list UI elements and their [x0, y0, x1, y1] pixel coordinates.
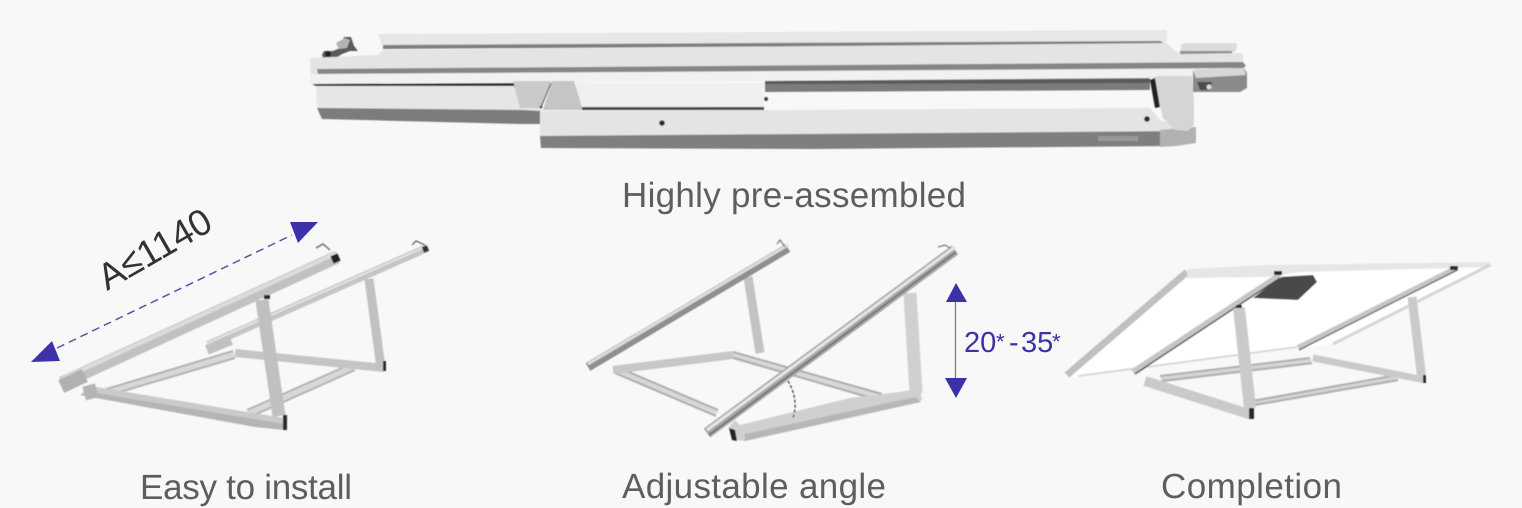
rear base beam	[235, 353, 384, 368]
lower left beam	[316, 86, 542, 124]
arrowhead up	[946, 283, 967, 302]
beam right end block	[1193, 68, 1247, 92]
side tubes	[1160, 358, 1398, 405]
caption: Completion: Completion	[1161, 467, 1342, 506]
front base beam	[728, 388, 922, 441]
rear rail	[1298, 268, 1457, 350]
angle label: *	[1052, 329, 1061, 354]
front post	[910, 293, 916, 393]
lower long beam	[540, 108, 1196, 149]
side tubes	[100, 351, 355, 416]
side tubes	[615, 352, 882, 416]
top rail	[378, 30, 1167, 49]
arrowhead upper	[290, 222, 318, 243]
front rail	[58, 244, 339, 393]
hinge plates	[513, 81, 583, 110]
angle label: 20	[964, 327, 996, 359]
arrowhead down	[945, 378, 967, 398]
arrow shaft	[954, 302, 956, 378]
channel under beam	[312, 78, 1150, 92]
rear base beam	[1313, 358, 1425, 380]
main beam	[310, 43, 1246, 84]
dashed line	[57, 235, 292, 348]
dashed angle arc	[788, 381, 795, 418]
product: folded pre-assembled bracket	[310, 30, 1247, 149]
rear base beam	[613, 355, 733, 370]
caption: Adjustable angle: Adjustable angle	[622, 467, 886, 506]
stand: easy to install	[58, 241, 428, 430]
solar panel underside	[1067, 262, 1491, 377]
dimension arrow: A≤1140	[31, 222, 318, 362]
front post	[1239, 308, 1250, 408]
angle arrow	[945, 283, 967, 398]
junction box	[1253, 275, 1317, 300]
front rail	[707, 245, 956, 435]
end cap	[1150, 76, 1194, 131]
black tube ends	[264, 295, 386, 430]
rear rail	[205, 241, 428, 355]
angle label: 35	[1021, 327, 1053, 359]
rear post	[1412, 297, 1422, 380]
caption: Easy to install: Easy to install	[140, 468, 352, 507]
clamp hardware left	[322, 37, 358, 58]
rear rail	[588, 240, 788, 367]
front leg	[262, 300, 279, 416]
black post ends	[1236, 266, 1458, 419]
angle label: *	[996, 329, 1005, 354]
front rail	[1133, 275, 1280, 374]
angle label: -	[1009, 327, 1019, 359]
arrowhead lower	[31, 341, 60, 362]
stand: adjustable angle	[588, 240, 956, 441]
folded short panel	[575, 83, 768, 110]
stand: completion with panel	[1067, 262, 1491, 419]
dimension label: A≤1140	[90, 200, 219, 298]
rear post	[748, 277, 760, 353]
small bracket piece right	[1180, 43, 1237, 54]
front base beam	[80, 383, 285, 430]
front base beam	[1145, 381, 1252, 415]
heading: Highly pre-assembled: Highly pre-assembled	[622, 176, 966, 215]
rear leg	[369, 279, 381, 368]
